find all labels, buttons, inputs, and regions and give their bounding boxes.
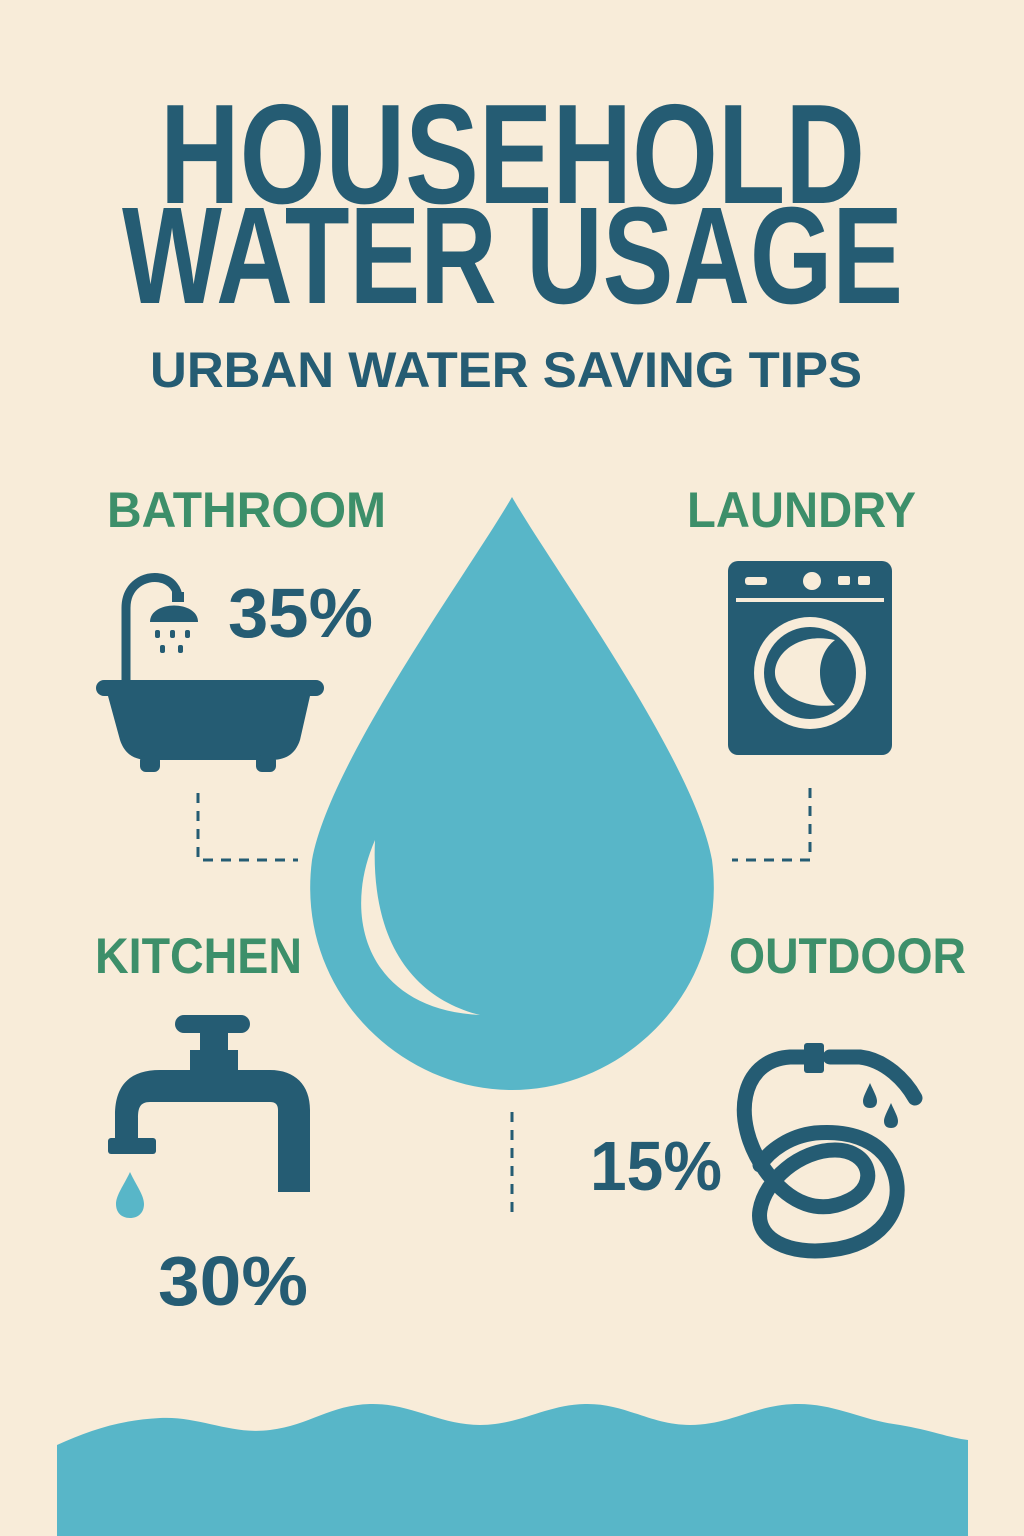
icon: garden hose bbox=[744, 1043, 915, 1251]
water waves bbox=[57, 1404, 968, 1536]
central water drop bbox=[310, 497, 714, 1090]
stat: bathroom 35%: 35% bbox=[228, 574, 373, 652]
icon: bathtub with shower bbox=[96, 577, 324, 772]
stat: outdoor 15%: 15% bbox=[590, 1127, 722, 1205]
label: outdoor: OUTDOOR bbox=[729, 928, 966, 984]
stat: kitchen 30%: 30% bbox=[158, 1242, 308, 1320]
label: laundry: LAUNDRY bbox=[687, 482, 916, 538]
label: kitchen: KITCHEN bbox=[95, 928, 302, 984]
icon: washing machine bbox=[728, 561, 892, 755]
icon: faucet bbox=[108, 1015, 310, 1218]
connector: bathroom bbox=[198, 793, 298, 860]
subtitle: URBAN WATER SAVING TIPS bbox=[150, 342, 862, 398]
label: bathroom: BATHROOM bbox=[107, 482, 386, 538]
connector: laundry bbox=[732, 788, 810, 860]
connector: center bbox=[510, 1112, 514, 1218]
title bbox=[122, 75, 903, 333]
